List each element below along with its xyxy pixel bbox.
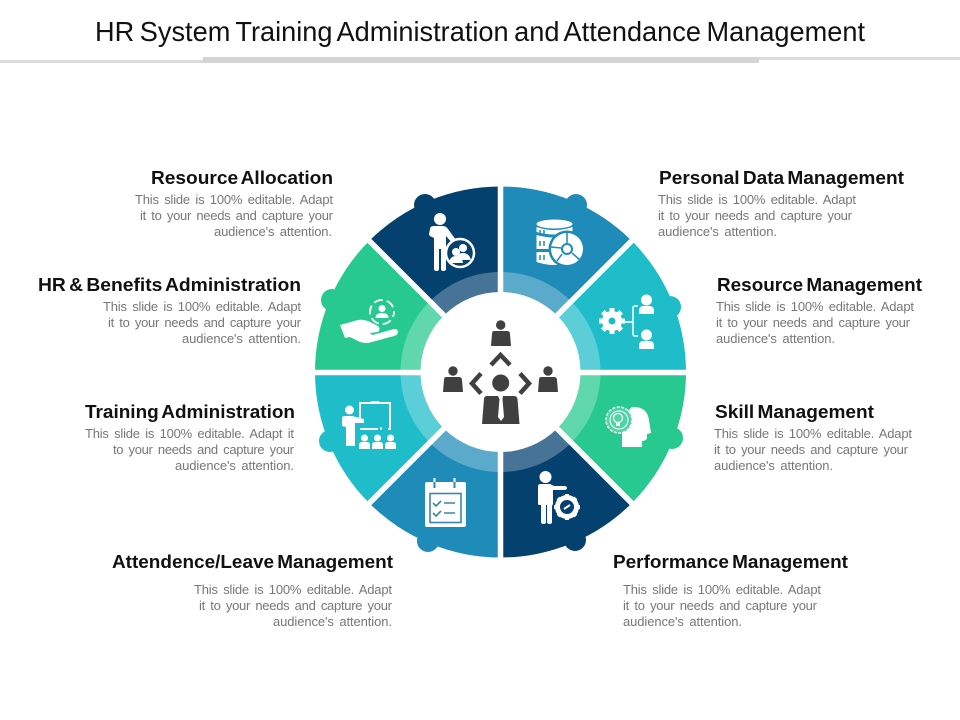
text block: resource management	[716, 274, 922, 346]
panel: skill management segment	[500, 372, 686, 503]
text block: personal data management: audience's attention.	[658, 224, 777, 239]
icon: database with pie chart	[536, 220, 586, 268]
text block: attendence/leave management	[112, 551, 393, 629]
text block: resource allocation: it to your needs and capture your	[140, 208, 334, 223]
text block: hr and benefits administration: HR & Benefits Administration	[38, 274, 301, 295]
text block: performance management: This slide is 100% editable. Adapt	[623, 582, 821, 597]
icon: head with light bulb gear	[606, 407, 651, 447]
panel: personal data management segment	[500, 186, 632, 372]
text block: skill management: audience's attention.	[714, 458, 833, 473]
title: HR System Training Administration and Attendance Management	[95, 16, 865, 47]
text block: skill management: This slide is 100% editable. Adapt	[714, 426, 912, 441]
text block: hr and benefits administration: This slide is 100% editable. Adapt	[103, 299, 301, 314]
text block: resource management: Resource Management	[717, 274, 922, 295]
text block: resource management: This slide is 100% editable. Adapt	[716, 299, 914, 314]
text block: personal data management: Personal Data Management	[659, 167, 904, 188]
icon: person with user circle	[429, 213, 474, 271]
icon: gear linked to two people	[599, 294, 654, 349]
text block: resource management: it to your needs and capture your	[716, 315, 911, 330]
text block: personal data management	[658, 167, 904, 239]
icon: central manager with team	[443, 320, 558, 424]
text block: training administration: to your needs and capture your	[113, 442, 295, 457]
text block: resource allocation: Resource Allocation	[151, 167, 333, 188]
text block: performance management: Performance Management	[613, 551, 848, 572]
text block: training administration: audience's attention.	[175, 458, 294, 473]
text block: skill management	[714, 401, 912, 473]
text block: hr and benefits administration	[38, 274, 302, 346]
text block: training administration: Training Administration	[85, 401, 295, 422]
text block: resource allocation	[135, 167, 334, 239]
text block: resource management: audience's attention.	[716, 331, 835, 346]
text block: resource allocation: audience's attention.	[214, 224, 332, 239]
panel: attendence/leave management segment	[369, 372, 500, 558]
text block: training administration: This slide is 100% editable. Adapt it	[85, 426, 294, 441]
panel: hr and benefits administration segment	[315, 241, 500, 372]
panel: resource management segment	[500, 241, 686, 372]
text block: attendence/leave management: Attendence/Leave Management	[112, 551, 393, 572]
icon: hand holding user	[340, 300, 398, 343]
text block: hr and benefits administration: it to your needs and capture your	[108, 315, 302, 330]
text block: attendence/leave management: This slide is 100% editable. Adapt	[194, 582, 392, 597]
text block: performance management	[613, 551, 848, 629]
text block: resource allocation: This slide is 100% editable. Adapt	[135, 192, 333, 207]
panel: resource allocation segment	[369, 186, 500, 372]
icon: calendar checklist	[425, 478, 466, 527]
text block: personal data management: it to your needs and capture your	[658, 208, 853, 223]
text block: performance management: it to your needs and capture your	[623, 598, 818, 613]
text block: attendence/leave management: it to your needs and capture your	[199, 598, 393, 613]
center white circle	[420, 292, 580, 452]
text block: hr and benefits administration: audience's attention.	[182, 331, 301, 346]
text block: skill management: Skill Management	[715, 401, 874, 422]
text block: attendence/leave management: audience's attention.	[273, 614, 392, 629]
panel: training administration segment	[315, 372, 500, 503]
text block: performance management: audience's attention.	[623, 614, 742, 629]
icon: trainer at board with audience	[342, 401, 396, 449]
text block: training administration	[85, 401, 295, 473]
text block: skill management: it to your needs and capture your	[714, 442, 909, 457]
text block: personal data management: This slide is 100% editable. Adapt	[658, 192, 856, 207]
panel: performance management segment	[500, 372, 632, 558]
icon: businessman with gear	[538, 471, 580, 524]
decorative light band	[400, 272, 600, 472]
